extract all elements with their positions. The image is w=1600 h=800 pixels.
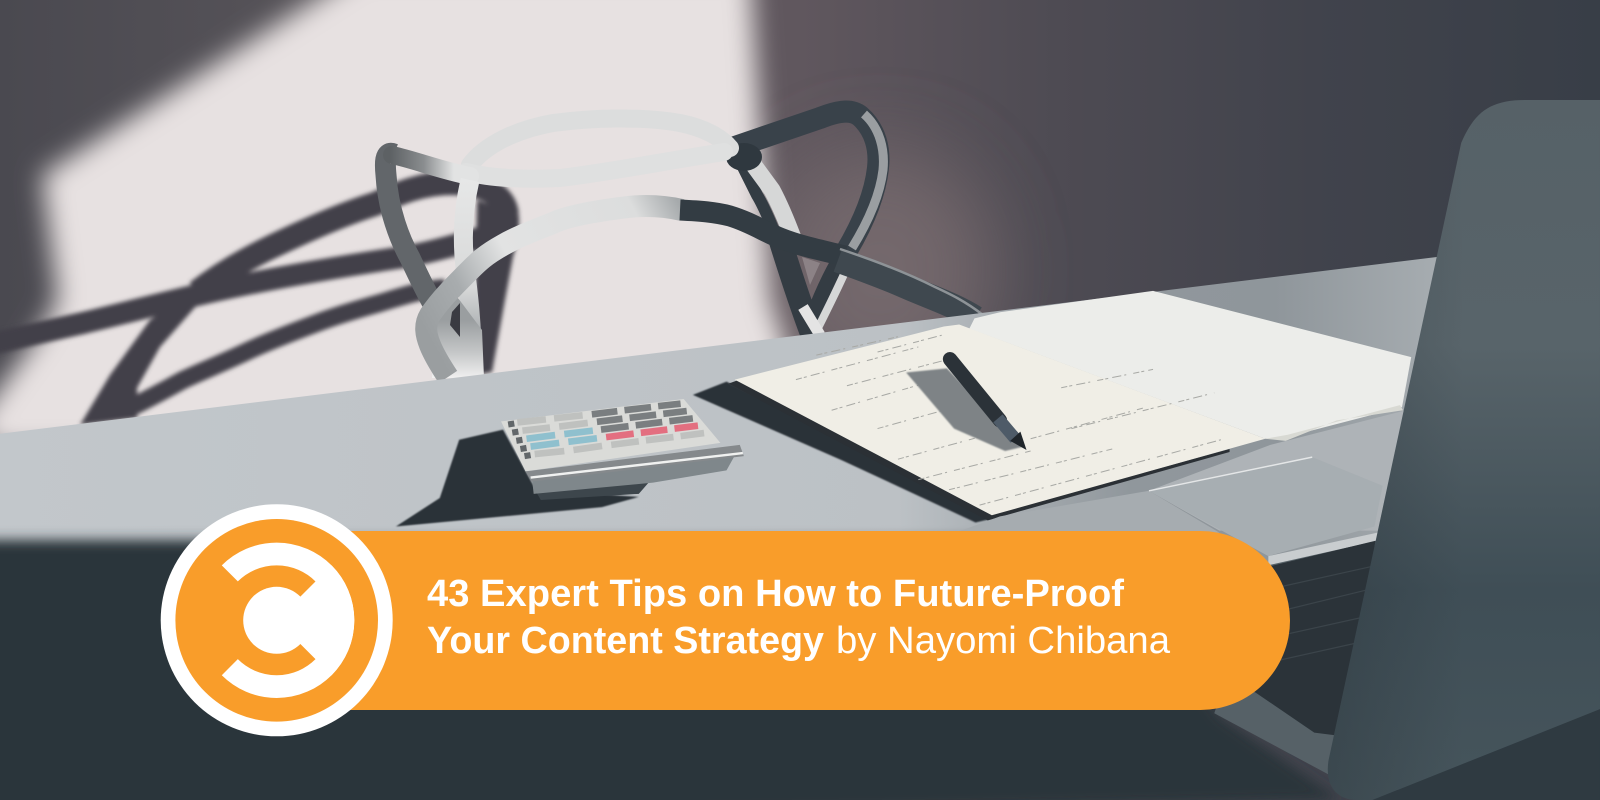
chair right front leg (803, 262, 845, 335)
logo badge (161, 504, 393, 736)
laptop lower deck (1214, 537, 1378, 796)
laptop lid (1328, 100, 1600, 800)
wall gap in chair (802, 257, 820, 285)
left page (735, 324, 1265, 515)
trackpad (1149, 457, 1383, 556)
calculator light keys (517, 415, 704, 454)
chair arm (838, 249, 983, 318)
chair lower leg cluster (432, 290, 484, 378)
chair corner knot (726, 143, 762, 171)
chair top loop (466, 118, 730, 179)
chair leg gap (450, 303, 460, 337)
lower right desk shadow (1372, 709, 1600, 800)
logo C mark (230, 554, 354, 687)
keyboard (1250, 541, 1375, 737)
calculator blue keys (527, 431, 597, 447)
foreground shadow (0, 540, 1340, 800)
right page (969, 291, 1411, 439)
banner title text (427, 573, 1171, 662)
desk surface (0, 256, 1449, 572)
author byline: by Nayomi Chibana (836, 620, 1171, 662)
chair lower arc (426, 206, 682, 377)
hinge strip (1268, 533, 1378, 565)
calculator red keys (606, 426, 698, 437)
calculator base (532, 452, 737, 494)
notebook (693, 291, 1411, 522)
calculator left column keys (508, 423, 531, 456)
notebook cover shadow (693, 382, 998, 522)
calculator shadow (396, 430, 639, 527)
book page curl (1265, 405, 1403, 441)
calculator underside (534, 478, 653, 500)
desk lower right (1149, 410, 1406, 531)
pen (950, 359, 1027, 450)
title banner (276, 531, 1290, 710)
title line two: Your Content Strategy (427, 620, 824, 662)
handwriting (796, 335, 1224, 505)
chair shadow (0, 183, 519, 425)
calculator face (501, 399, 720, 471)
laptop front corner (961, 491, 1219, 541)
desk objects (396, 100, 1600, 800)
chair inner right leg (742, 160, 812, 335)
chair (385, 112, 983, 378)
title line one: 43 Expert Tips on How to Future-Proof (427, 573, 1124, 615)
pen shadow (906, 368, 1022, 451)
chair right ear (732, 112, 883, 252)
chair dark arc (680, 210, 845, 256)
notebook spine edge (729, 381, 1230, 520)
calculator (501, 399, 744, 500)
calculator front rim (526, 445, 744, 482)
logo outer ring (161, 504, 393, 736)
chair front upright (463, 180, 473, 372)
laptop base (961, 410, 1406, 796)
calculator dark keys (592, 404, 693, 430)
logo orange disc (175, 519, 378, 722)
chair left ear and leg (385, 153, 470, 304)
